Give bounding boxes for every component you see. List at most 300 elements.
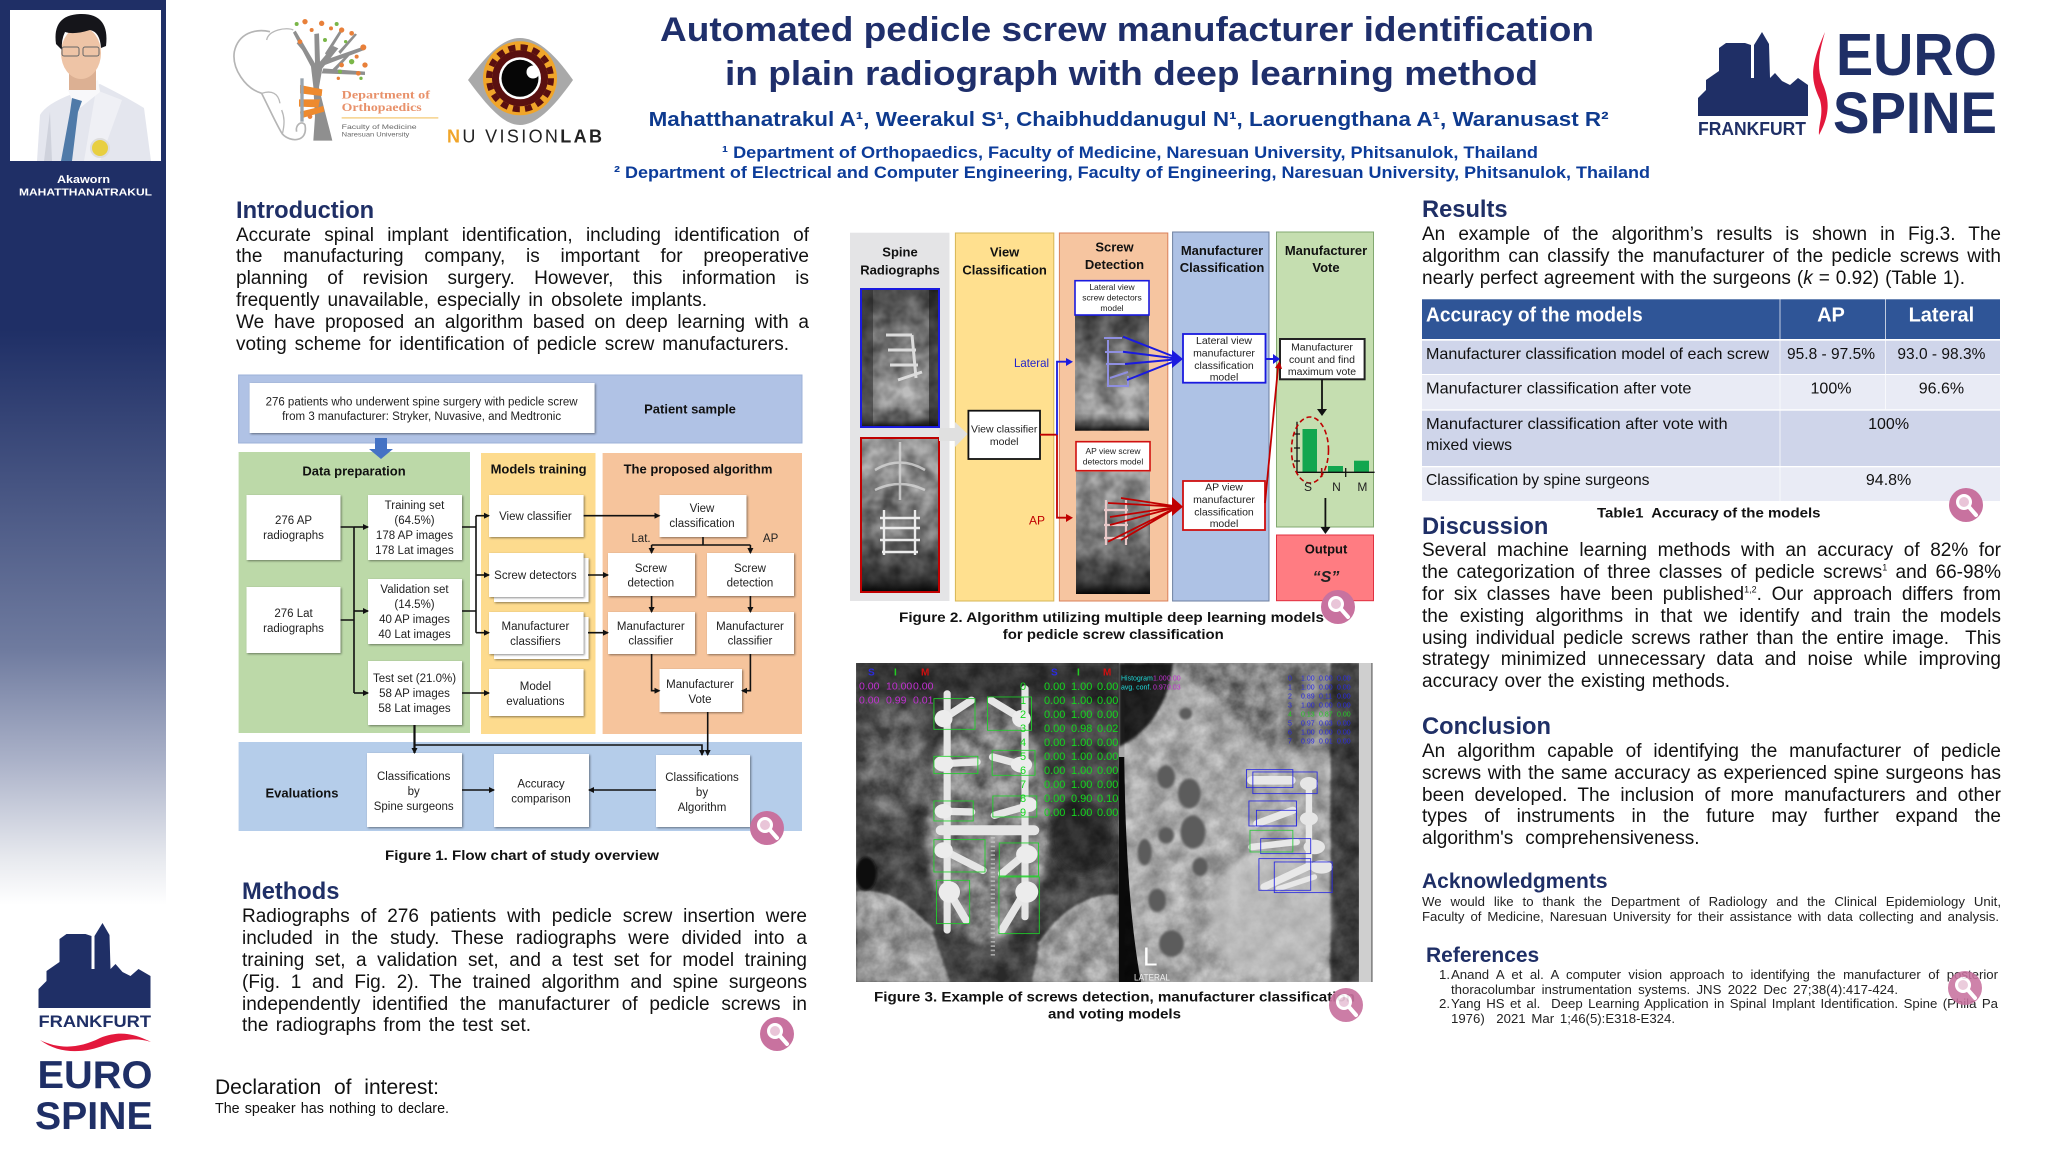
panel: view classification: Lateral [1014, 356, 1049, 370]
speaker name: Akaworn [57, 174, 110, 186]
panel: data preparation: 276 AP [275, 515, 312, 527]
table row: mixed views: Manufacturer classification after vote with [1426, 416, 1728, 433]
authors: Mahatthanatrakul A¹, Weerakul S¹, Chaibhuddanugul N¹, Laoruengthana A¹, Waranusast R² [649, 109, 1609, 131]
caption: figure 3: and voting models [1048, 1006, 1181, 1022]
text: discussion: Several machine learning methods with an accuracy of 82% for [1422, 540, 2001, 561]
text: conclusion: been developed. The inclusion of more manufacturers and other [1422, 785, 2001, 806]
panel: the proposed algorithm: classifier [728, 636, 773, 648]
panel: the proposed algorithm: Manufacturer [617, 621, 685, 633]
text: discussion: the existing algorithms in that we identify and train the models [1422, 606, 2001, 627]
heading: Results: Results [1422, 197, 1508, 223]
text: methods [242, 906, 807, 1036]
labels: AP classification scores: 0.00 [913, 681, 934, 692]
table row: spine surgeons: 94.8% [1866, 472, 1911, 489]
labels: AP classification scores: 0.00 [1097, 736, 1118, 748]
panel: the proposed algorithm: View [690, 503, 715, 515]
panel: screw detection: Detection [1085, 257, 1144, 272]
panel: screw detection: Lateral view [1089, 282, 1136, 292]
panel: models training: Manufacturer [502, 621, 569, 633]
panel: models training: View classifier [499, 511, 572, 523]
logo: EuroSpine Frankfurt sidebar: EURO [38, 1054, 152, 1097]
panel: data preparation: 276 Lat [274, 608, 313, 620]
caption: figure 1: Figure 1. Flow chart of study overview [385, 847, 659, 863]
list: references: Yang HS et al. Deep Learning Application in Spinal Implant Identification. Spine (Phila Pa [1451, 996, 1998, 1011]
labels: lateral classification scores: 5 [1288, 720, 1292, 727]
labels: AP classification scores: 0.00 [1044, 736, 1065, 748]
radiograph: lateral view [1119, 663, 1372, 982]
labels: lateral classification scores: 0.00 [1337, 711, 1351, 718]
labels: AP classification scores: 0.00 [859, 695, 880, 706]
panel: view classification [939, 233, 1054, 601]
table row: each screw: 95.8 - 97.5% [1787, 346, 1875, 363]
sidebar: navy gradient panel [0, 0, 166, 905]
text: methods: included in the study. These radiographs were divided into a [242, 928, 807, 949]
declaration of interest: Declaration of interest: [215, 1076, 439, 1099]
labels: lateral classification scores: avg. conf. [1121, 684, 1151, 691]
labels: AP classification scores: 0.00 [1044, 694, 1065, 706]
panel: spine radiographs [850, 233, 950, 601]
text: methods: the radiographs from the test set. [242, 1015, 531, 1036]
logo: EuroSpine Frankfurt sidebar [35, 923, 153, 1132]
logo: Department of Orthopaedics: Department of [342, 87, 431, 101]
labels: AP classification scores: S [868, 667, 875, 678]
table row: mixed views: mixed views [1426, 437, 1512, 454]
labels: lateral classification scores: 0.01 [1319, 738, 1333, 745]
labels: lateral classification scores: 0.00 [1167, 675, 1181, 682]
table row: after vote: 96.6% [1919, 380, 1964, 397]
labels: lateral classification scores: 1 [1288, 684, 1292, 691]
text: introduction: frequently unavailable, especially in obsolete implants. [236, 290, 707, 311]
panel: evaluations: Accuracy [517, 778, 565, 790]
labels: AP classification scores: 0.00 [859, 681, 880, 692]
labels: lateral classification scores: 0.00 [1337, 729, 1351, 736]
labels: lateral classification scores: 2 [1288, 693, 1292, 700]
title: in plain radiograph with deep learning method [725, 55, 1538, 93]
table: accuracy of the models [1422, 299, 2000, 501]
labels: lateral classification scores: 0.11 [1319, 693, 1332, 700]
panel: the proposed algorithm: classifier [628, 636, 673, 648]
labels: AP classification scores: 5 [1020, 750, 1026, 762]
list: references: Anand A et al. A computer vision approach to identifying the manufacturer of posterior [1451, 967, 1998, 982]
panel: view classification: model [990, 436, 1019, 448]
panel: the proposed algorithm: Manufacturer [716, 621, 784, 633]
labels: lateral classification scores: 1.00 [1301, 702, 1315, 709]
bar chart: vote counts [1292, 417, 1375, 494]
panel: manufacturer classification: Classification [1180, 260, 1264, 275]
labels: AP classification scores: M [921, 667, 929, 678]
icon: magnifier on figure 2 [1321, 590, 1355, 624]
labels: AP classification scores: 0.00 [1044, 792, 1065, 804]
panel: data preparation: 58 Lat images [378, 703, 451, 715]
panel: manufacturer classification: model [1210, 372, 1238, 384]
table row: spine surgeons: Classification by spine surgeons [1426, 472, 1650, 489]
labels: lateral classification scores: 1.00 [1301, 675, 1315, 682]
heading: Introduction: Introduction [236, 198, 374, 224]
table header: Lateral [1909, 305, 1974, 327]
labels: AP classification scores [859, 667, 1118, 818]
labels: AP classification scores: 0.00 [1044, 764, 1065, 776]
labels: lateral classification scores: 0.03 [1319, 720, 1333, 727]
affiliations: ² Department of Electrical and Computer Engineering, Faculty of Engineering, Naresuan University, Phitsanulok, Thailand [614, 164, 1650, 182]
text: methods: (Fig. 1 and Fig. 2). The trained algorithm and spine surgeons [242, 972, 807, 993]
panel: screw detection [1059, 233, 1168, 601]
labels: lateral classification scores: 0.13 [1301, 711, 1315, 718]
labels: lateral classification scores: 3 [1288, 702, 1292, 709]
logo: NU VisionLab [447, 38, 602, 146]
text: introduction: the manufacturing company, is important for preoperative [236, 246, 809, 267]
panel: models training: Screw detectors [494, 570, 577, 582]
panel: evaluations: by [696, 787, 708, 799]
labels: AP classification scores: 6 [1020, 764, 1026, 776]
text: discussion: accuracy over the existing methods. [1422, 671, 1730, 692]
panel: evaluations: by [408, 786, 420, 798]
panel: output: “S” [1313, 569, 1339, 586]
labels: AP classification scores: 4 [1020, 736, 1026, 748]
labels: lateral classification scores: 0.87 [1319, 711, 1333, 718]
speaker name [19, 174, 153, 199]
panel: data preparation: 58 AP images [379, 688, 450, 700]
panel: the proposed algorithm: Screw [734, 563, 767, 575]
labels: AP classification scores: 0.10 [1097, 792, 1118, 804]
text: conclusion: types of instruments in the future may further expand the [1422, 806, 2001, 827]
panel: manufacturer classification: manufacturer [1193, 348, 1255, 360]
panel: patient sample: 276 patients who underwent spine surgery with pedicle screw [266, 396, 578, 408]
panel: patient sample: Patient sample [644, 402, 736, 416]
panel: data preparation: Data preparation [302, 464, 406, 478]
labels: AP classification scores: 2 [1020, 708, 1026, 720]
panel: the proposed algorithm: Vote [688, 694, 712, 706]
text: conclusion: screws with the same accuracy as experienced spine surgeons has [1422, 763, 2001, 784]
labels: AP classification scores: I [1077, 667, 1080, 678]
labels: AP classification scores: 0.00 [1097, 806, 1118, 818]
text: acknowledgments: We would like to thank the Department of Radiology and the Clinical Epidemiology Unit, [1422, 894, 2001, 909]
panel: the proposed algorithm [603, 453, 802, 734]
icon: magnifier on figure 1 [750, 811, 784, 845]
labels: AP classification scores: 0.98 [1071, 722, 1092, 734]
labels: AP classification scores: 3 [1020, 722, 1026, 734]
text: discussion: the categorization of three classes of pedicle screws1 and 66-98% [1422, 562, 2001, 583]
affiliations [614, 144, 1650, 182]
radiograph: AP view [855, 663, 1119, 982]
labels: lateral classification scores: 6 [1288, 729, 1292, 736]
affiliations: ¹ Department of Orthopaedics, Faculty of Medicine, Naresuan University, Phitsanulok, Thailand [722, 144, 1538, 162]
bar chart: vote counts: N [1332, 480, 1341, 494]
labels: AP classification scores: 1.00 [1071, 736, 1092, 748]
logo: Department of Orthopaedics: Faculty of Medicine [342, 124, 417, 131]
list: references: 1. [1439, 967, 1450, 982]
panel: manufacturer classification: manufacturer [1193, 494, 1255, 506]
bar chart: vote counts: S [1304, 480, 1312, 494]
text: discussion: strategy minimized unnecessary data and noise while improving [1422, 649, 2001, 670]
panel: manufacturer classification: model [1210, 518, 1238, 530]
logo: Department of Orthopaedics: Naresuan University [342, 132, 410, 139]
text: conclusion: An algorithm capable of identifying the manufacturer of pedicle [1422, 741, 2001, 762]
caption: figure 3 [874, 988, 1355, 1022]
panel: evaluations [239, 742, 802, 831]
panel: evaluations: Algorithm [678, 802, 726, 814]
panel: spine radiographs: Radiographs [860, 262, 940, 278]
title: Automated pedicle screw manufacturer identification [660, 11, 1594, 49]
panel: patient sample: from 3 manufacturer: Stryker, Nuvasive, and Medtronic [282, 411, 561, 423]
table row: mixed views [1426, 416, 1909, 454]
table header [1426, 305, 1974, 327]
labels: lateral classification scores: 0.03 [1167, 684, 1181, 691]
table header: AP [1817, 305, 1845, 327]
text: methods: Radiographs of 276 patients with pedicle screw insertion were [242, 906, 807, 927]
panel: models training [481, 453, 596, 734]
labels: AP classification scores: 0.02 [1097, 722, 1118, 734]
labels: AP classification scores: 0.00 [1044, 680, 1065, 692]
labels: AP classification scores: 0.00 [1044, 778, 1065, 790]
labels: AP classification scores: 1.00 [1071, 778, 1092, 790]
labels: AP classification scores: 1.00 [1071, 764, 1092, 776]
labels: AP classification scores: 9 [1020, 806, 1026, 818]
labels: AP classification scores: 0.99 [886, 695, 907, 706]
panel: output: Output [1305, 542, 1348, 556]
text: introduction: We have proposed an algorithm based on deep learning with a [236, 312, 809, 333]
text: methods: independently identified the manufacturer of pedicle screws in [242, 994, 807, 1015]
panel: screw detection: detectors model [1083, 456, 1143, 466]
table row: after vote: 100% [1811, 380, 1851, 397]
labels: AP classification scores: 0.90 [1071, 792, 1092, 804]
panel: data preparation: Test set (21.0%) [373, 673, 456, 685]
panel: the proposed algorithm: Screw [635, 563, 667, 575]
panel: screw detection: screw detectors [1082, 292, 1142, 302]
labels: AP classification scores: S [1051, 667, 1058, 678]
labels: AP classification scores: 1.00 [1071, 750, 1092, 762]
panel: models training: evaluations [506, 696, 565, 708]
labels: AP classification scores: 0.00 [1097, 764, 1118, 776]
table row: each screw [1426, 346, 1985, 363]
icon: magnifier on table [1949, 488, 1983, 522]
labels: AP classification scores: 7 [1020, 778, 1026, 790]
text: introduction: voting scheme for identification of pedicle screw manufacturers. [236, 334, 789, 355]
panel: spine radiographs: Spine [882, 244, 918, 260]
labels: lateral classification scores: 0.00 [1319, 702, 1333, 709]
labels: lateral classification scores: LATERAL [1134, 972, 1170, 982]
labels: lateral classification scores: 1.00 [1301, 729, 1315, 736]
title [660, 11, 1594, 93]
figure 3: detection example radiographs [856, 663, 1372, 982]
panel: evaluations: Evaluations [266, 786, 338, 800]
icon: magnifier on references [1948, 971, 1982, 1005]
panel: data preparation: 178 AP images [376, 530, 453, 542]
labels: AP classification scores: 10.00 [886, 681, 912, 692]
text: results [1422, 224, 2001, 289]
labels: lateral classification scores: 7 [1288, 738, 1292, 745]
panel: models training: classifiers [510, 636, 561, 648]
logo: Department of Orthopaedics [233, 19, 438, 141]
labels: AP classification scores: 0.00 [1044, 722, 1065, 734]
panel: screw detection: model [1100, 303, 1124, 313]
panel: the proposed algorithm: detection [627, 578, 674, 590]
labels: AP classification scores: I [894, 667, 897, 678]
labels: AP classification scores: 0.00 [1044, 806, 1065, 818]
arrows: pipeline connectors [1040, 337, 1330, 542]
table row: each screw: Manufacturer classification model of each screw [1426, 346, 1769, 363]
speaker name: MAHATTHANATRAKUL [19, 187, 153, 199]
connectors: flow arrows [340, 516, 750, 790]
table row: spine surgeons [1426, 472, 1911, 489]
panel: output [1276, 535, 1374, 601]
labels: lateral classification scores: 0.97 [1301, 720, 1315, 727]
panel: models training: Models training [491, 462, 587, 476]
labels: AP classification scores: 1.00 [1071, 680, 1092, 692]
labels: AP classification scores: 1.00 [1071, 694, 1092, 706]
list: references: thoracolumbar instrumentation systems. JNS 2022 Dec 27;38(4):417-424. [1451, 982, 1898, 997]
panel: manufacturer classification [1173, 232, 1269, 601]
text: acknowledgments: Faculty of Medicine, Naresuan University for their assistance with data collecting and analysis. [1422, 909, 1999, 924]
text: discussion: using individual pedicle screws rather than the entire image. This [1422, 628, 2001, 648]
speaker photo [10, 10, 161, 161]
labels: AP classification scores: 0.01 [913, 695, 934, 706]
panel: manufacturer vote: maximum vote [1288, 366, 1356, 378]
panel: data preparation: 178 Lat images [375, 545, 454, 557]
labels: lateral classification scores: 0.00 [1337, 675, 1351, 682]
heading: Methods: Methods [242, 879, 339, 905]
panel: view classification: View classifier [971, 424, 1038, 436]
labels: lateral classification scores: 0.00 [1337, 702, 1351, 709]
labels: AP classification scores: 0 [1020, 680, 1026, 692]
labels: lateral classification scores: 0.99 [1301, 738, 1315, 745]
caption: figure 2: for pedicle screw classification [1003, 626, 1224, 642]
labels: AP classification scores: 0.00 [1097, 680, 1118, 692]
labels: lateral classification scores: 0.00 [1337, 738, 1351, 745]
labels: AP classification scores: 0.00 [1044, 708, 1065, 720]
logo: Department of Orthopaedics: Orthopaedics [342, 100, 422, 114]
heading: Acknowledgments: Acknowledgments [1422, 870, 1608, 893]
panel: screw detection: AP view screw [1085, 446, 1141, 456]
panel: data preparation: (64.5%) [394, 515, 435, 527]
panel: the proposed algorithm: classification [669, 518, 735, 530]
text: results: nearly perfect agreement with the surgeons (k = 0.92) (Table 1). [1422, 268, 1965, 289]
panel: screw detection: Screw [1095, 240, 1135, 254]
table row: each screw: 93.0 - 98.3% [1897, 346, 1985, 363]
labels: lateral classification scores [1121, 675, 1351, 982]
table row: after vote [1426, 380, 1964, 397]
panel: models training: Model [520, 681, 551, 693]
panel: view classification: View [990, 244, 1020, 260]
labels: lateral classification scores: 0.00 [1319, 675, 1333, 682]
list: references: 1976) 2021 Mar 1;46(5):E318-E324. [1451, 1011, 1675, 1026]
labels: lateral classification scores: 4 [1288, 711, 1292, 718]
text: discussion: for six classes have been published1,2. Our approach differs from [1422, 584, 2001, 605]
bar chart: vote counts: M [1357, 480, 1367, 494]
panel: the proposed algorithm: The proposed algorithm [624, 462, 772, 476]
table row: after vote: Manufacturer classification after vote [1426, 380, 1692, 397]
panel: evaluations: Spine surgeons [374, 801, 454, 813]
panel: manufacturer classification: Lateral view [1196, 335, 1252, 347]
table row: mixed views: 100% [1868, 416, 1909, 433]
labels: AP classification scores: 0.00 [1097, 750, 1118, 762]
panel: manufacturer classification: classification [1194, 506, 1254, 518]
panel: manufacturer vote: Manufacturer [1291, 342, 1353, 354]
list: references: 2. [1439, 996, 1450, 1011]
panel: data preparation: radiographs [263, 530, 324, 542]
panel: manufacturer classification: classification [1194, 360, 1254, 372]
panel: data preparation: Training set [385, 500, 445, 512]
labels: AP classification scores: 8 [1020, 792, 1026, 804]
text: results: An example of the algorithm’s results is shown in Fig.3. The [1422, 224, 2001, 245]
text: methods: training set, a validation set, and a test set for model training [242, 950, 807, 971]
labels: AP classification scores: M [1103, 667, 1111, 678]
labels: lateral classification scores: 1.00 [1153, 675, 1167, 682]
caption: figure 3: Figure 3. Example of screws detection, manufacturer classification [874, 988, 1355, 1004]
text: discussion [1422, 540, 2001, 692]
logo: EuroSpine Frankfurt sidebar: FRANKFURT [38, 1012, 152, 1031]
labels: lateral classification scores: 1.00 [1301, 684, 1315, 691]
panel: evaluations: Classifications [665, 772, 739, 784]
labels: lateral classification scores: 0.97 [1153, 684, 1167, 691]
labels: lateral classification scores: L [1143, 941, 1157, 971]
caption: figure 2 [899, 609, 1324, 642]
figure 1: flow chart [238, 374, 802, 831]
text: results: algorithm can classify the manufacturer of the pedicle screws with [1422, 246, 2001, 267]
labels: lateral classification scores: 0 [1288, 675, 1292, 682]
panel: data preparation: 40 AP images [379, 614, 450, 626]
labels: AP classification scores: 0.00 [1097, 694, 1118, 706]
arrow: patient sample to data preparation [369, 438, 393, 459]
table header: Accuracy of the models [1426, 305, 1643, 327]
panel: data preparation: radiographs [263, 623, 324, 635]
text: introduction: Accurate spinal implant identification, including identification of [236, 224, 809, 246]
labels: AP classification scores: 1.00 [1071, 708, 1092, 720]
panel: evaluations: comparison [511, 794, 571, 806]
panel: data preparation: 40 Lat images [378, 629, 451, 641]
labels: lateral classification scores: 0.89 [1301, 693, 1315, 700]
panel: evaluations: Classifications [377, 771, 451, 783]
declaration of interest: The speaker has nothing to declare. [215, 1101, 449, 1117]
text: introduction [236, 224, 810, 355]
panel: data preparation: Validation set [380, 584, 449, 596]
icon: magnifier on methods [760, 1017, 794, 1051]
panel: manufacturer vote: count and find [1289, 354, 1355, 366]
panel: data preparation: (14.5%) [394, 599, 435, 611]
panel: the proposed algorithm: detection [727, 578, 773, 590]
icon: magnifier on figure 3 [1329, 988, 1363, 1022]
labels: AP classification scores: 0.00 [1097, 778, 1118, 790]
text: conclusion [1422, 741, 2001, 849]
caption: figure 2: Figure 2. Algorithm utilizing multiple deep learning models [899, 609, 1324, 625]
labels: lateral classification scores: 0.00 [1319, 729, 1333, 736]
labels: AP classification scores: 1.00 [1071, 806, 1092, 818]
labels: AP classification scores: 1 [1020, 694, 1026, 706]
panel: patient sample [239, 375, 802, 443]
text: conclusion: algorithm's comprehensiveness. [1422, 828, 1700, 849]
caption: table 1: Table1 Accuracy of the models [1597, 504, 1821, 520]
logo: EuroSpine Frankfurt top right [1698, 28, 1997, 138]
panel: the proposed algorithm: Manufacturer [666, 679, 734, 691]
panel: manufacturer classification: Manufacturer [1181, 243, 1263, 258]
heading: Conclusion: Conclusion [1422, 714, 1551, 740]
panel: view classification: Classification [962, 262, 1047, 278]
labels: lateral classification scores: 0.00 [1337, 684, 1351, 691]
panel: view classification: AP [1029, 514, 1045, 528]
panel: the proposed algorithm: AP [763, 533, 779, 545]
panel: data preparation [239, 452, 470, 733]
panel: manufacturer classification: AP view [1205, 482, 1243, 494]
panel: the proposed algorithm: Lat. [631, 533, 651, 545]
text: acknowledgments [1422, 894, 2001, 924]
text: introduction: planning of revision surgery. However, this information is [236, 268, 809, 289]
panel: manufacturer vote: Manufacturer [1285, 243, 1367, 258]
panel: manufacturer vote: Vote [1312, 260, 1340, 275]
labels: lateral classification scores: 0.00 [1337, 693, 1351, 700]
labels: lateral classification scores: 0.00 [1337, 720, 1351, 727]
figure 2: algorithm pipeline [850, 232, 1375, 602]
labels: AP classification scores: 0.00 [1097, 708, 1118, 720]
heading: References: References [1426, 944, 1539, 967]
